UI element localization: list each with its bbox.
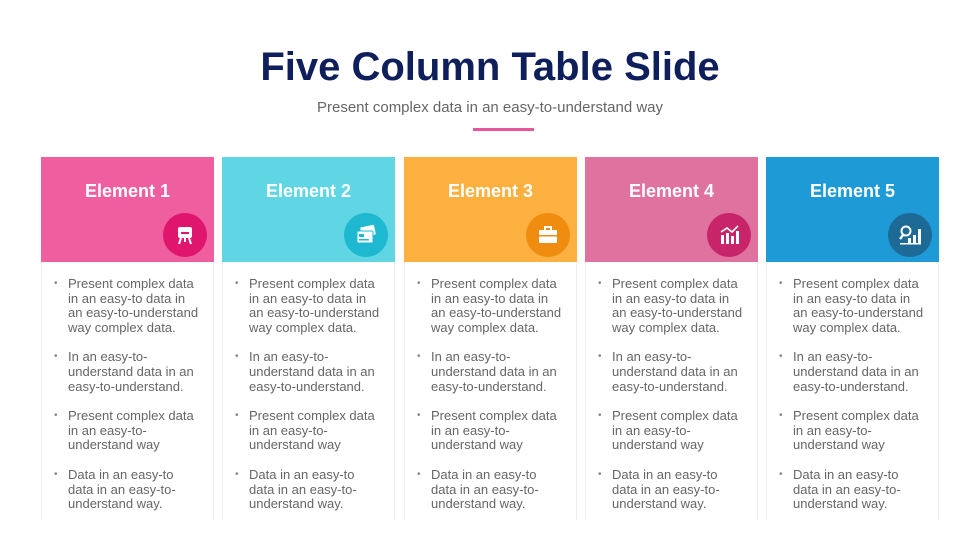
body 3: way complex data. (431, 320, 539, 335)
body 2: Present complex data (249, 276, 375, 291)
body 3: Present complex data (431, 408, 557, 423)
body 2: in an easy-to- (249, 423, 328, 438)
body 3: easy-to-understand. (431, 379, 547, 394)
body 1: understand data in an (68, 364, 194, 379)
body 1: in an easy-to- (68, 423, 147, 438)
header 2 (222, 157, 395, 262)
body 5: understand way. (793, 496, 887, 511)
body 3 (404, 262, 577, 520)
body 5: in an easy-to data in (793, 291, 910, 306)
body 5: in an easy-to- (793, 423, 872, 438)
body 3: In an easy-to- (431, 349, 510, 364)
body 2: understand way. (249, 496, 343, 511)
body 2: Data in an easy-to (249, 467, 355, 482)
body 1: Data in an easy-to (68, 467, 174, 482)
body 1: an easy-to-understand (68, 305, 198, 320)
column 5 (766, 157, 939, 520)
body 1: way complex data. (68, 320, 176, 335)
icon: search chart (888, 213, 932, 257)
body 4: understand way (612, 437, 704, 452)
column 2 (222, 157, 395, 520)
header 5 (766, 157, 939, 262)
column 1 (41, 157, 214, 520)
body 5: In an easy-to- (793, 349, 872, 364)
body 5: understand data in an (793, 364, 919, 379)
body 1: Present complex data (68, 276, 194, 291)
body 2: an easy-to-understand (249, 305, 379, 320)
body 1: understand way (68, 437, 160, 452)
body 5: an easy-to-understand (793, 305, 923, 320)
body 4 (585, 262, 758, 520)
body 4: Present complex data (612, 408, 738, 423)
body 5: data in an easy-to- (793, 482, 901, 497)
body 5: understand way (793, 437, 885, 452)
header 4 (585, 157, 758, 262)
body 4: understand data in an (612, 364, 738, 379)
accent underline (473, 128, 534, 131)
body 3: understand way. (431, 496, 525, 511)
body 2: Present complex data (249, 408, 375, 423)
header 3 (404, 157, 577, 262)
subtitle: Present complex data in an easy-to-understand way (317, 99, 663, 116)
body 2: In an easy-to- (249, 349, 328, 364)
body 2: way complex data. (249, 320, 357, 335)
body 1: understand way. (68, 496, 162, 511)
body 3: Present complex data (431, 276, 557, 291)
body 1: in an easy-to data in (68, 291, 185, 306)
body 3: in an easy-to data in (431, 291, 548, 306)
column 3 (404, 157, 577, 520)
body 5: Data in an easy-to (793, 467, 899, 482)
column 4 (585, 157, 758, 520)
header 4: Element 4 (629, 181, 714, 201)
body 4: Data in an easy-to (612, 467, 718, 482)
body 2: easy-to-understand. (249, 379, 365, 394)
body 4: understand way. (612, 496, 706, 511)
body 5: Present complex data (793, 408, 919, 423)
body 3: an easy-to-understand (431, 305, 561, 320)
body 2: data in an easy-to- (249, 482, 357, 497)
header 2: Element 2 (266, 181, 351, 201)
body 2 (222, 262, 395, 520)
body 3: data in an easy-to- (431, 482, 539, 497)
body 3: understand way (431, 437, 523, 452)
body 2: understand data in an (249, 364, 375, 379)
body 5: easy-to-understand. (793, 379, 909, 394)
header 1 (41, 157, 214, 262)
body 4: Present complex data (612, 276, 738, 291)
header 1: Element 1 (85, 181, 170, 201)
body 5: way complex data. (793, 320, 901, 335)
body 4: easy-to-understand. (612, 379, 728, 394)
body 4: data in an easy-to- (612, 482, 720, 497)
body 3: Data in an easy-to (431, 467, 537, 482)
icon: card (344, 213, 388, 257)
header 3: Element 3 (448, 181, 533, 201)
body 4: in an easy-to data in (612, 291, 729, 306)
body 4: in an easy-to- (612, 423, 691, 438)
header 5: Element 5 (810, 181, 895, 201)
body 5 (766, 262, 939, 520)
body 3: in an easy-to- (431, 423, 510, 438)
body 1: easy-to-understand. (68, 379, 184, 394)
body 1 (41, 262, 214, 520)
body 1: In an easy-to- (68, 349, 148, 364)
body 2: in an easy-to data in (249, 291, 366, 306)
icon: chart (707, 213, 751, 257)
icon: briefcase (526, 213, 570, 257)
body 3: understand data in an (431, 364, 557, 379)
body 2: understand way (249, 437, 341, 452)
body 1: Present complex data (68, 408, 194, 423)
body 1: data in an easy-to- (68, 482, 176, 497)
icon: easel (163, 213, 207, 257)
body 5: Present complex data (793, 276, 919, 291)
title: Five Column Table Slide (260, 45, 720, 89)
body 4: In an easy-to- (612, 349, 692, 364)
body 4: way complex data. (612, 320, 720, 335)
body 4: an easy-to-understand (612, 305, 742, 320)
